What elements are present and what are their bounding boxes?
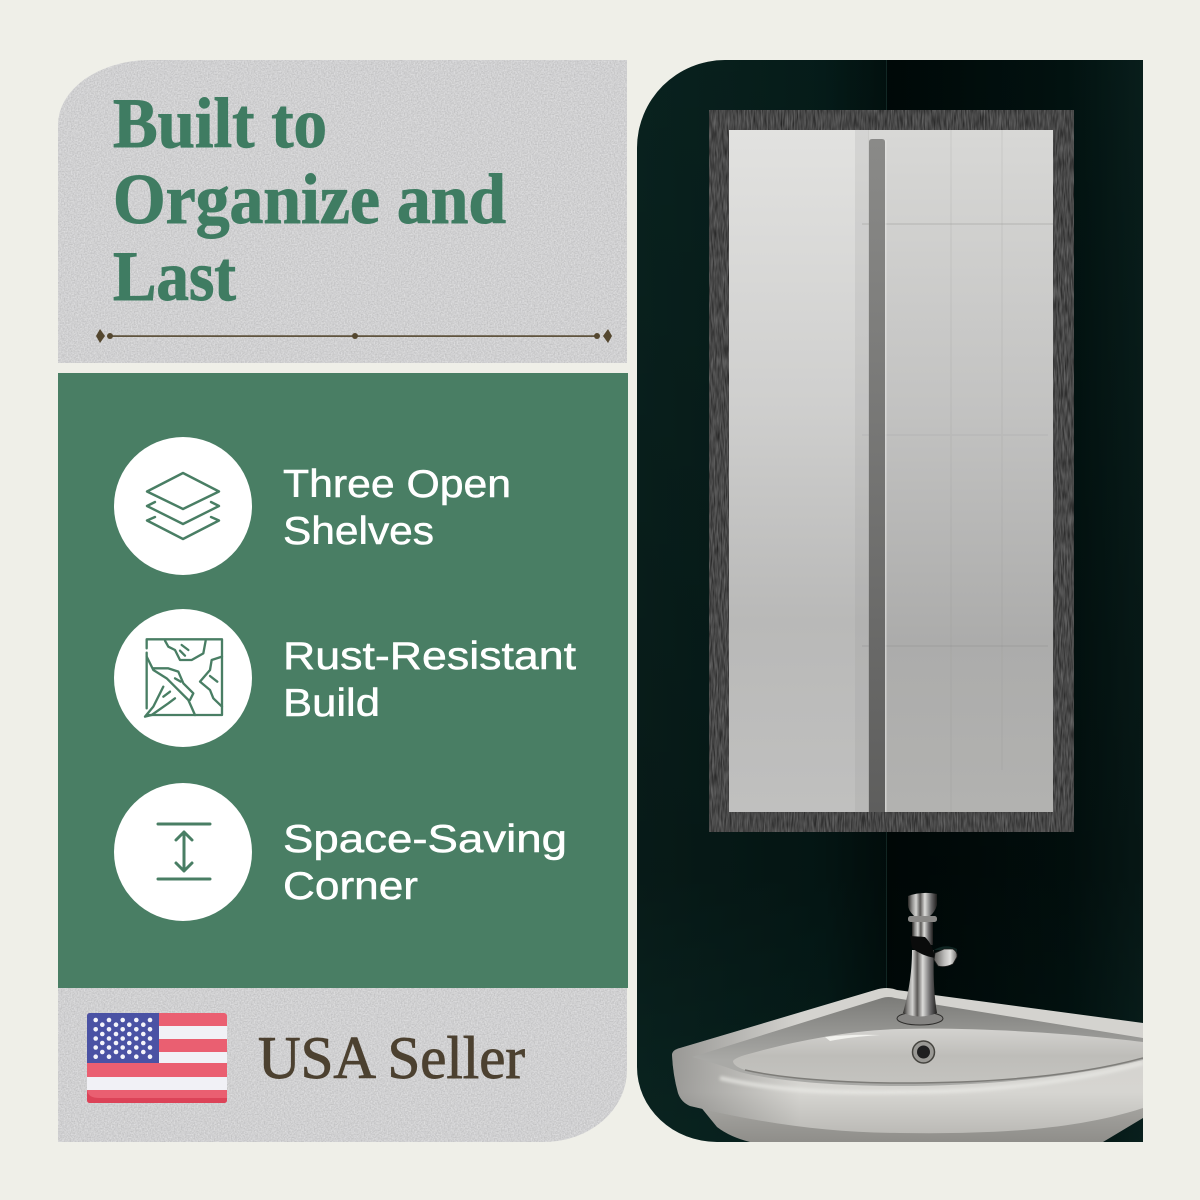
mirror reflection rod: [869, 139, 885, 812]
icon: stacked layers: [147, 473, 219, 539]
title: [113, 85, 506, 316]
feature: space-saving corner: Corner: [283, 865, 418, 908]
wall: [637, 60, 1143, 1142]
sink pedestal: [702, 1108, 1143, 1142]
feature: three open shelves: [114, 437, 511, 575]
chrome faucet: [897, 893, 957, 1025]
panel: product photo: [637, 60, 1143, 1142]
feature: three open shelves: Shelves: [283, 510, 434, 553]
feature: rust-resistant build: [114, 609, 576, 747]
icon: usa flag: [87, 1013, 227, 1103]
title: Built to: [113, 85, 327, 163]
title: Organize and: [113, 161, 506, 239]
ornamental divider: [96, 329, 612, 343]
seller label: USA Seller: [258, 1025, 525, 1091]
title: Last: [113, 238, 236, 316]
panel: features: [58, 373, 628, 988]
panel: seller background: [58, 988, 627, 1142]
sink deck: [692, 997, 1143, 1086]
corner sink: [672, 988, 1143, 1142]
icon: vertical clearance arrow: [158, 824, 210, 879]
sink basin: [733, 1029, 1143, 1083]
feature: rust-resistant build: Build: [283, 682, 380, 725]
feature: three open shelves: Three Open: [283, 463, 511, 506]
feature: space-saving corner: Space-Saving: [283, 818, 567, 861]
icon: corroded tile: [145, 639, 222, 717]
feature: rust-resistant build: Rust-Resistant: [283, 635, 576, 678]
feature: space-saving corner: [114, 783, 567, 921]
sink rim and front band: [672, 988, 1143, 1133]
corner mirror: [709, 110, 1074, 832]
sink overflow drain: [912, 1041, 934, 1063]
panel: title background: [58, 60, 627, 363]
